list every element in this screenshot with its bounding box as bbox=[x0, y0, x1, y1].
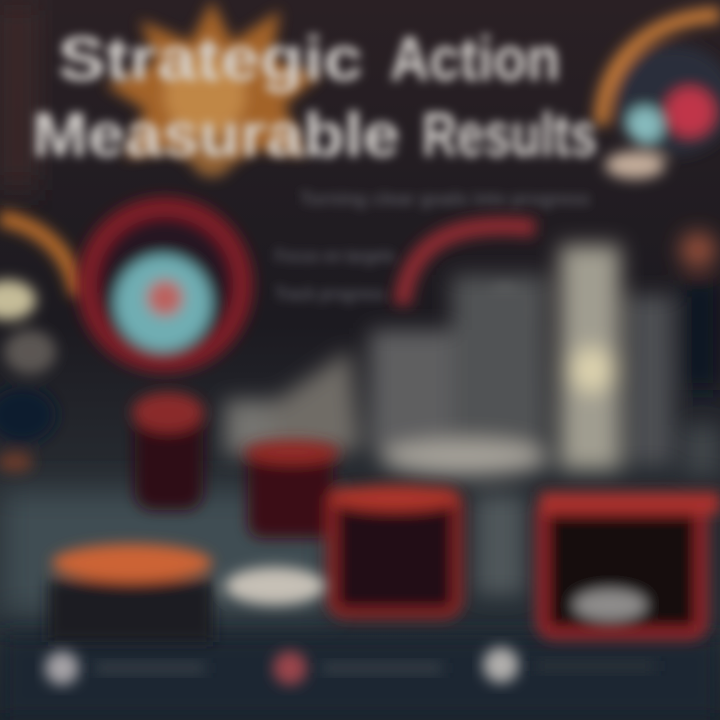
cylinder 3 bbox=[329, 485, 461, 614]
chart: pale rising columns bbox=[225, 232, 720, 595]
icon: second arc bbox=[402, 226, 535, 332]
cylinder 4 bbox=[540, 492, 720, 634]
title: Action bbox=[390, 25, 560, 94]
cylinder 2 bbox=[244, 440, 340, 538]
subtitle text block bbox=[275, 189, 590, 304]
legend label 2 bbox=[322, 662, 442, 674]
icon: left arc bbox=[0, 218, 78, 472]
subtitle text block: Focus on targets bbox=[275, 246, 395, 266]
legend label 3 bbox=[535, 660, 655, 672]
title: Results bbox=[422, 101, 597, 170]
legend icon 3 bbox=[483, 647, 519, 683]
subtitle text block: Track progress bbox=[275, 284, 385, 304]
white disc bbox=[225, 567, 325, 605]
cylinder 1 bbox=[132, 392, 204, 510]
legend label 1 bbox=[95, 662, 205, 674]
chart: red cylinders bbox=[132, 392, 720, 634]
legend bbox=[45, 647, 655, 685]
title: Measurable bbox=[32, 101, 400, 170]
icon: target bbox=[87, 207, 243, 363]
legend icon 2 bbox=[273, 651, 307, 685]
icon: sunburst bbox=[105, 0, 320, 177]
icon: rainbow arc top right bbox=[602, 15, 720, 179]
subtitle text block: Turning clear goals into progress bbox=[300, 189, 590, 209]
orange disc bbox=[48, 544, 213, 642]
chart: discs bbox=[48, 544, 325, 642]
title: Strategic bbox=[58, 25, 363, 94]
title bbox=[32, 25, 597, 170]
legend icon 1 bbox=[45, 651, 79, 685]
